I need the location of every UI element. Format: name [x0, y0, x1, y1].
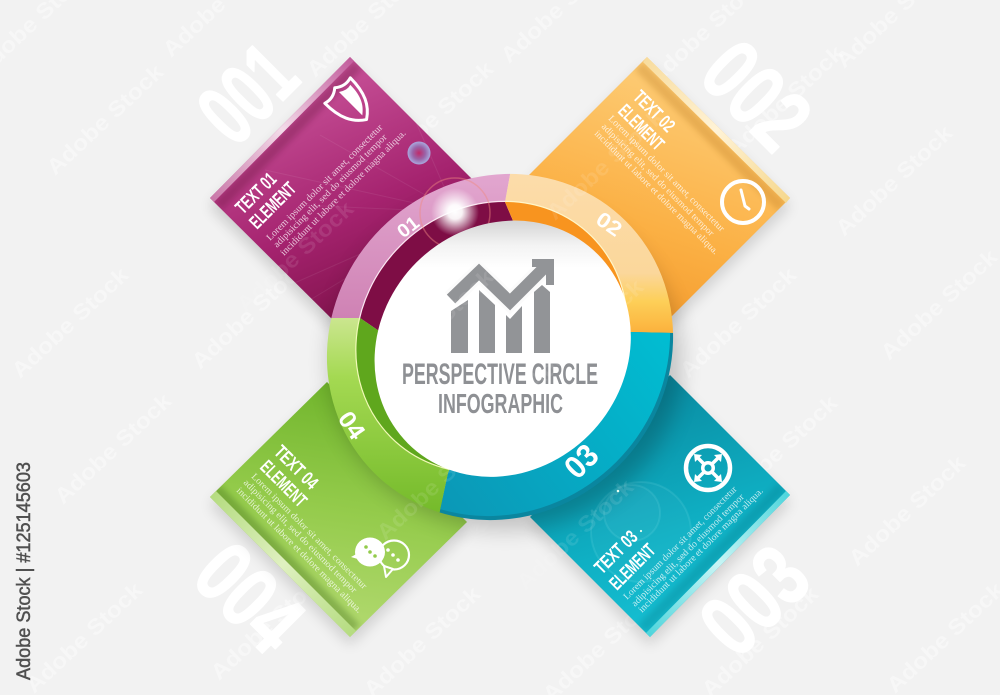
text block: card 04 body: incididunt ut labore et dolore magna aliqua. — [234, 486, 363, 615]
icon: compass arrows — [686, 446, 730, 490]
heading: text 04 element — [255, 442, 322, 512]
heading: text 04 element: ELEMENT — [255, 457, 311, 512]
ring label 03: 03 — [557, 437, 606, 486]
heading: text 03 element: TEXT 03 — [591, 527, 642, 579]
ring label 04: 04 — [332, 406, 371, 445]
watermark pattern: Adobe Stock — [831, 120, 958, 241]
heading: perspective circle infographic: PERSPECTIVE CIRCLE — [402, 358, 598, 391]
text block: card 04 body: adipisicing elit, sed do eiusmod tempor — [241, 478, 359, 596]
icon: growth chart — [451, 259, 554, 353]
text block: card 02 body: Lorem ipsum dolor sit amet, consectetur — [606, 114, 727, 235]
heading: text 01 element: ELEMENT — [246, 178, 301, 234]
ring label 02: 02 — [591, 208, 626, 242]
panel: card 02 orange — [528, 57, 790, 326]
text block: card 01 body: adipisicing elit, sed do eiusmod tempor — [272, 132, 390, 250]
heading: perspective circle infographic — [402, 358, 598, 419]
heading: text 02 element: TEXT 02 — [628, 87, 679, 137]
heading: text 04 element: TEXT 04 — [269, 442, 322, 494]
flare sparkles — [617, 490, 642, 532]
panel: card 03 teal — [530, 375, 790, 645]
watermark pattern: Adobe Stock — [716, 390, 843, 511]
heading: text 03 element: ELEMENT — [606, 540, 660, 595]
panel: card 01 purple — [210, 57, 480, 335]
text block: card 02 body: adipisicing elit, sed do eiusmod tempor — [599, 122, 716, 239]
ring shadow — [329, 194, 681, 530]
watermark pattern: Adobe Stock — [187, 253, 314, 374]
heading: text 02 element — [613, 87, 679, 155]
panel: centre circle — [322, 168, 684, 530]
icon: lens bubble — [408, 142, 430, 164]
heading: text 01 element — [232, 169, 301, 234]
text block: card 01 body: incididunt ut labore et dolore magna aliqua. — [279, 129, 408, 258]
watermark overlay on graphic — [232, 104, 669, 595]
heading: text 01 element: TEXT 01 — [232, 169, 281, 219]
icon: clock — [722, 181, 764, 223]
watermark pattern: Adobe Stock — [7, 262, 134, 383]
watermark overlay on graphic: Adobe Stock — [512, 474, 639, 595]
ring segment 03 teal — [440, 332, 674, 520]
watermark pattern: Adobe Stock — [675, 262, 802, 383]
watermark pattern: Adobe Stock — [21, 577, 148, 695]
number 004: 004 — [176, 523, 324, 671]
watermark pattern: Adobe Stock — [372, 56, 499, 177]
ring segment 01 purple — [331, 174, 513, 330]
icon: shield — [322, 75, 379, 132]
text block: card 04 body: Lorem ipsum dolor sit amet, consectetur — [249, 472, 369, 592]
watermark overlay on graphic: Adobe Stock — [372, 264, 499, 385]
ring segment 04 green — [326, 318, 450, 512]
side credit text: Adobe Stock | #125145603 — [14, 462, 35, 680]
watermark pattern: Adobe Stock — [876, 244, 1000, 365]
ring: perspective circle — [326, 174, 674, 520]
number 003: 003 — [680, 526, 828, 674]
watermark overlay on graphic: Adobe Stock — [522, 274, 649, 395]
watermark pattern: Adobe Stock — [844, 450, 971, 571]
number 002: 002 — [683, 21, 831, 169]
watermark pattern: Adobe Stock — [50, 388, 177, 509]
text block: card 02 body: incididunt ut labore et dolore magna aliqua. — [592, 129, 720, 257]
heading: text 03 element — [591, 527, 660, 595]
watermark pattern: Adobe Stock — [722, 40, 849, 161]
watermark pattern: Adobe Stock — [206, 564, 333, 685]
ring segment 02 orange — [505, 174, 673, 333]
text block: card 03 body: Lorem ipsum dolor sit amet, consectetur — [622, 484, 740, 602]
panel: card 04 green — [210, 382, 467, 645]
lens flare — [420, 178, 490, 248]
text block: card 03 body: adipisicing elit, sed do eiusmod tempor — [630, 492, 747, 609]
watermark overlay on graphic: Adobe Stock — [232, 196, 359, 317]
watermark pattern: Adobe Stock — [882, 577, 1000, 695]
ring label 01: 01 — [393, 212, 424, 243]
watermark pattern: Adobe Stock — [42, 59, 169, 180]
watermark overlay on graphic: Adobe Stock — [372, 424, 499, 545]
text block: card 01 body: Lorem ipsum dolor sit amet, consectetur — [265, 122, 386, 243]
icon: speech bubbles — [351, 538, 409, 577]
heading: perspective circle infographic: INFOGRAPHIC — [438, 388, 563, 419]
heading: text 02 element: ELEMENT — [613, 101, 668, 155]
lens flare rings — [591, 482, 691, 582]
watermark overlay on graphic: Adobe Stock — [542, 104, 669, 225]
text block: card 03 body: incididunt ut labore et dolore magna aliqua. — [637, 486, 766, 615]
